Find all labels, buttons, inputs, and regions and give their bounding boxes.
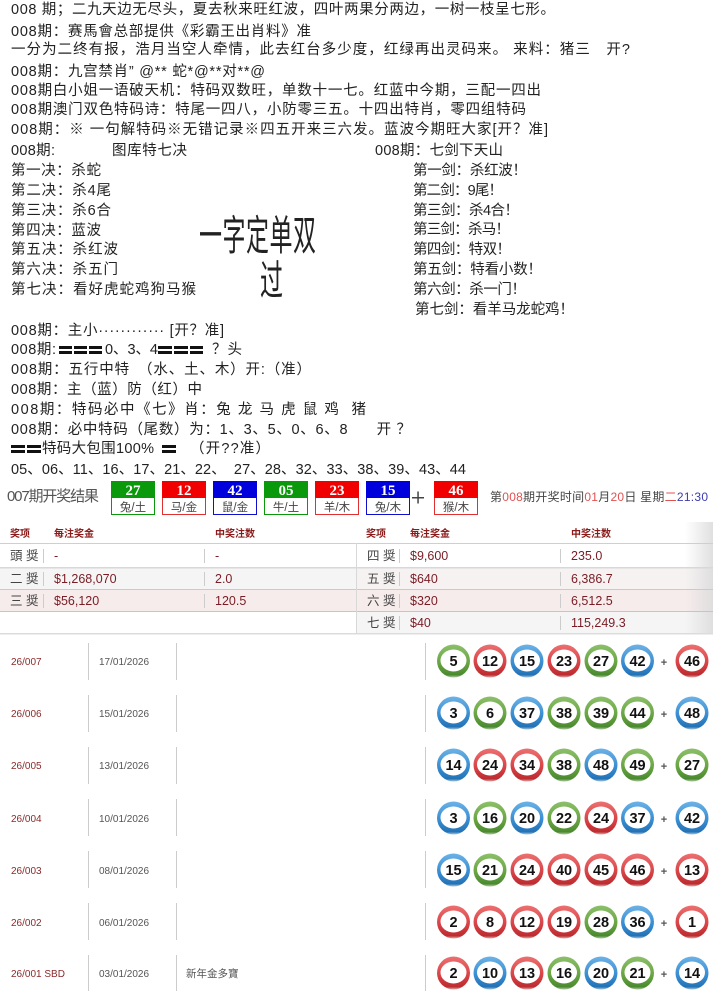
left table rows xyxy=(10,549,246,608)
left table rows: 2.0 xyxy=(215,572,232,586)
left table rows: 三 奨 xyxy=(10,594,39,608)
panel: past draws info columns: 10/01/2026 xyxy=(99,814,149,825)
list: seven tips: 第二决：杀4尾 xyxy=(11,181,111,199)
list: seven tips xyxy=(11,161,196,298)
chip 27: 兔/土 xyxy=(120,500,146,514)
chip 15: 15 xyxy=(380,483,396,499)
left table rows: $1,268,070 xyxy=(54,572,117,586)
text block: top predictions xyxy=(11,1,630,138)
balls row: 26/001: 10 xyxy=(482,966,498,982)
balls row: 26/004: 22 xyxy=(556,811,572,827)
balls row: 26/006: 48 xyxy=(684,706,700,722)
balls row: 26/004: 16 xyxy=(482,811,498,827)
balls row: 26/006: 44 xyxy=(629,706,646,722)
right table rows: 六 奨 xyxy=(367,594,396,608)
right table rows: $9,600 xyxy=(410,549,448,563)
chip 05: 05 xyxy=(278,483,294,499)
balls row: 26/005 xyxy=(437,748,708,782)
balls row: 26/005: 24 xyxy=(482,758,498,774)
big slogan: 过 xyxy=(260,259,283,305)
left table rows: $56,120 xyxy=(54,594,99,608)
balls row: 26/002: + xyxy=(661,918,667,930)
chip 12: 马/金 xyxy=(171,500,198,514)
balls row: 26/007: 27 xyxy=(593,654,609,670)
right table rows: 四 奨 xyxy=(367,549,396,563)
list: seven swords: 第二剑：9尾！ xyxy=(413,181,503,199)
right table rows: 115,249.3 xyxy=(571,616,626,630)
balls row: 26/005: 27 xyxy=(684,758,700,774)
balls row: 26/006: 37 xyxy=(519,706,535,722)
chip 46 xyxy=(434,481,478,514)
right table rows: $40 xyxy=(410,616,431,630)
balls row: 26/004: 3 xyxy=(449,811,458,827)
table headers: 奖项 xyxy=(366,527,386,540)
balls row: 26/003: 45 xyxy=(593,863,609,879)
big slogan: 一字定单双 xyxy=(199,214,316,260)
panel: past draws info columns: 15/01/2026 xyxy=(99,709,149,720)
panel: past draws info columns: 新年金多寶 xyxy=(186,967,238,980)
heading: left seven tips: 图库特七决 xyxy=(112,142,188,159)
text block: middle predictions: 05、06、11、16、17、21、22、 27、28、32、33、38、39、43、44 xyxy=(11,462,466,478)
right table rows xyxy=(367,549,626,630)
balls row: 26/006: 3 xyxy=(449,706,458,722)
balls row: 26/007: 42 xyxy=(629,654,646,670)
table headers: 每注奖金 xyxy=(54,527,94,540)
text block: top predictions: 008 期；二九天边无尽头，夏去秋来旺红波，四叶两果分两边，一树一枝呈七形。 xyxy=(11,1,555,18)
text block: top predictions: 008期澳门双色特码诗：特尾一四八，小防零三五。十四出特肖，零四组特码 xyxy=(11,101,526,118)
text block: middle predictions: ？头 xyxy=(212,341,242,358)
panel: prize table xyxy=(0,520,713,634)
balls row: 26/006 xyxy=(437,696,708,730)
balls row: 26/001: + xyxy=(661,969,667,981)
text block: middle predictions: 008期：主（蓝）防（红）中 xyxy=(11,381,202,398)
chip 42 xyxy=(213,481,257,514)
table headers: 每注奖金 xyxy=(410,527,450,540)
balls row: 26/003: + xyxy=(661,866,667,878)
panel: past draws info columns: 26/003 xyxy=(11,866,42,877)
list: seven tips: 第一决：杀蛇 xyxy=(11,161,101,179)
chip 12 xyxy=(162,481,206,514)
balls row: 26/003: 15 xyxy=(445,863,462,879)
heading: right seven swords: 008期：七剑下天山 xyxy=(375,142,503,159)
chip 46: 猴/木 xyxy=(443,500,470,514)
balls row: 26/005: 48 xyxy=(593,758,609,774)
chip 23: 23 xyxy=(330,483,344,499)
left table rows: 二 奨 xyxy=(10,572,39,586)
balls row: 26/003: 24 xyxy=(519,863,535,879)
balls row: 26/002: 28 xyxy=(593,915,609,931)
chip 12: 12 xyxy=(176,483,192,499)
right table rows: 五 奨 xyxy=(367,572,396,586)
text block: middle predictions: （开??准） xyxy=(190,440,270,457)
balls row: 26/007: 5 xyxy=(449,654,458,670)
heading: left seven tips xyxy=(11,142,188,159)
chip 23: 羊/木 xyxy=(324,500,351,514)
balls row: 26/006: 6 xyxy=(486,706,494,722)
panel: past draws info columns: 26/005 xyxy=(11,761,42,772)
balls row: 26/003: 13 xyxy=(684,863,700,879)
balls row: 26/007: 15 xyxy=(519,654,535,670)
balls row: 26/004: 20 xyxy=(519,811,535,827)
panel: past draws info columns: 03/01/2026 xyxy=(99,969,149,980)
balls row: 26/007 xyxy=(437,644,708,678)
balls row: 26/001 xyxy=(437,956,708,990)
right table rows: 6,386.7 xyxy=(571,572,613,586)
balls row: 26/007: 46 xyxy=(684,654,700,670)
right table rows: $640 xyxy=(410,572,438,586)
balls row: 26/007: 23 xyxy=(556,654,572,670)
text block: top predictions: 008期白小姐一语破天机：特码双数旺，单数十一七。红蓝中今期，三配一四出 xyxy=(11,82,541,99)
left table rows: - xyxy=(54,549,58,563)
plus sign xyxy=(412,492,424,504)
panel: past draws info columns: 17/01/2026 xyxy=(99,657,149,668)
chip 42: 鼠/金 xyxy=(222,500,249,514)
chip 15: 兔/木 xyxy=(375,500,402,514)
list: seven swords xyxy=(413,161,574,318)
balls row: 26/001: 13 xyxy=(519,966,535,982)
table headers: 奖项 xyxy=(10,527,30,540)
text block: top predictions: 008期：九宫禁肖” @** 蛇*@**对**@ xyxy=(11,63,265,80)
balls row: 26/001: 21 xyxy=(629,966,646,982)
list: seven tips: 第四决：蓝波 xyxy=(11,221,102,239)
left table rows: 120.5 xyxy=(215,594,246,608)
list: seven swords: 第六剑：杀一门！ xyxy=(413,280,526,298)
chip 42: 42 xyxy=(228,483,242,499)
right table rows: 6,512.5 xyxy=(571,594,613,608)
balls row: 26/004: 37 xyxy=(629,811,646,827)
balls row: 26/001: 2 xyxy=(449,966,458,982)
balls row: 26/004: + xyxy=(661,814,667,826)
balls row: 26/005: + xyxy=(661,761,667,773)
list: seven swords: 第五剑：特看小数！ xyxy=(413,260,542,278)
table headers: 中奖注数 xyxy=(571,527,611,540)
chip 27: 27 xyxy=(126,483,141,499)
results heading: 007期开奖结果 xyxy=(7,488,99,505)
balls row: 26/007: 12 xyxy=(482,654,498,670)
balls row: 26/003: 46 xyxy=(629,863,646,879)
balls row: 26/006: 38 xyxy=(556,706,572,722)
right table rows: 七 奨 xyxy=(367,616,396,630)
balls row: 26/001: 14 xyxy=(684,966,700,982)
text block: middle predictions: 0、3、4 xyxy=(105,342,158,358)
text block: middle predictions: 008期：主小············ [开？准] xyxy=(11,322,224,339)
chip 05: 牛/土 xyxy=(273,500,299,514)
list: seven swords: 第一剑：杀红波！ xyxy=(413,161,527,179)
balls row: 26/005: 38 xyxy=(556,758,572,774)
balls row: 26/003: 21 xyxy=(482,863,498,879)
balls row: 26/002: 36 xyxy=(629,915,646,931)
table headers xyxy=(10,527,611,540)
panel: past draws info columns xyxy=(11,643,426,991)
panel: past draws info columns: 26/001 SBD xyxy=(11,969,65,980)
balls row: 26/002: 12 xyxy=(519,915,535,931)
panel: past draws info columns: 26/004 xyxy=(11,814,42,825)
big slogan xyxy=(199,214,316,305)
panel: past draws info columns: 13/01/2026 xyxy=(99,761,149,772)
list: seven swords: 第三剑：杀4合！ xyxy=(413,201,519,219)
text block: middle predictions: 特码大包围100% xyxy=(42,440,154,457)
balls row: 26/006: + xyxy=(661,709,667,721)
next draw time: 第008期开奖时间01月20日 星期二21:30 xyxy=(490,490,708,504)
heading: left seven tips: 008期: xyxy=(11,142,55,159)
panel: past draws info columns: 26/007 xyxy=(11,657,42,668)
balls row: 26/003: 40 xyxy=(556,863,572,879)
balls row: 26/005: 14 xyxy=(445,758,462,774)
left table rows: - xyxy=(215,549,219,563)
left table rows: 頭 奨 xyxy=(10,549,39,563)
text block: middle predictions: 008期：必中特码（尾数）为：1、3、5、0、6、8 开 ？ xyxy=(11,421,411,438)
chip 23 xyxy=(315,481,359,514)
text block: middle predictions: 008期: xyxy=(11,341,56,358)
list: seven tips: 第六决：杀五门 xyxy=(11,260,118,278)
balls row: 26/005: 49 xyxy=(629,758,646,774)
balls row: 26/003 xyxy=(437,854,708,886)
text block: top predictions: 一分为二终有报，浩月当空人牵情，此去红台多少度，红绿再出灵码来。 来料：猪三 开? xyxy=(11,41,630,58)
balls row: 26/002 xyxy=(437,906,708,938)
panel: past draws info columns: 26/002 xyxy=(11,918,42,929)
balls row: 26/002: 2 xyxy=(449,915,458,931)
balls row: 26/004 xyxy=(437,802,708,834)
balls row: 26/004: 24 xyxy=(593,811,609,827)
chip 27 xyxy=(111,481,155,514)
text block: middle predictions: 008期：五行中特 （水、土、木）开:（准） xyxy=(11,361,311,378)
list: seven swords: 第四剑：特双！ xyxy=(413,240,511,258)
panel: past draws info columns: 06/01/2026 xyxy=(99,918,149,929)
list: seven tips: 第七决：看好虎蛇鸡狗马猴 xyxy=(11,280,196,298)
text block: middle predictions: 008期：特码必中《七》肖：兔 龙 马 虎 鼠 鸡 猪 xyxy=(11,401,366,418)
list: seven tips: 第三决：杀6合 xyxy=(11,201,112,219)
chip 05 xyxy=(264,481,308,514)
balls row: 26/006: 39 xyxy=(593,706,609,722)
balls row: 26/002: 8 xyxy=(486,915,494,931)
table headers: 中奖注数 xyxy=(215,527,255,540)
balls row: 26/002: 19 xyxy=(556,915,572,931)
text block: top predictions: 008期：赛馬會总部提供《彩霸王出肖料》准 xyxy=(11,23,311,40)
text block: middle predictions xyxy=(11,322,466,478)
right table rows: 235.0 xyxy=(571,549,602,563)
balls row: 26/002: 1 xyxy=(688,915,696,931)
list: seven swords: 第三剑：杀马！ xyxy=(413,220,510,238)
balls row: 26/004: 42 xyxy=(684,811,700,827)
chip 46: 46 xyxy=(448,483,464,499)
balls row: 26/007: + xyxy=(661,657,667,669)
balls row: 26/001: 16 xyxy=(556,966,572,982)
draw result chips xyxy=(111,481,478,514)
right table rows: $320 xyxy=(410,594,438,608)
list: seven swords: 第七剑：看羊马龙蛇鸡！ xyxy=(415,300,574,318)
chip 15 xyxy=(366,481,410,514)
list: seven tips: 第五决：杀红波 xyxy=(11,240,118,258)
balls row: 26/005: 34 xyxy=(519,758,535,774)
panel: past draws info columns: 08/01/2026 xyxy=(99,866,149,877)
balls row: 26/001: 20 xyxy=(593,966,609,982)
panel: past draws info columns: 26/006 xyxy=(11,709,42,720)
text block: top predictions: 008期：※ 一句解特码※无错记录※四五开来三六发。蓝波今期旺大家[开？准] xyxy=(11,121,548,138)
